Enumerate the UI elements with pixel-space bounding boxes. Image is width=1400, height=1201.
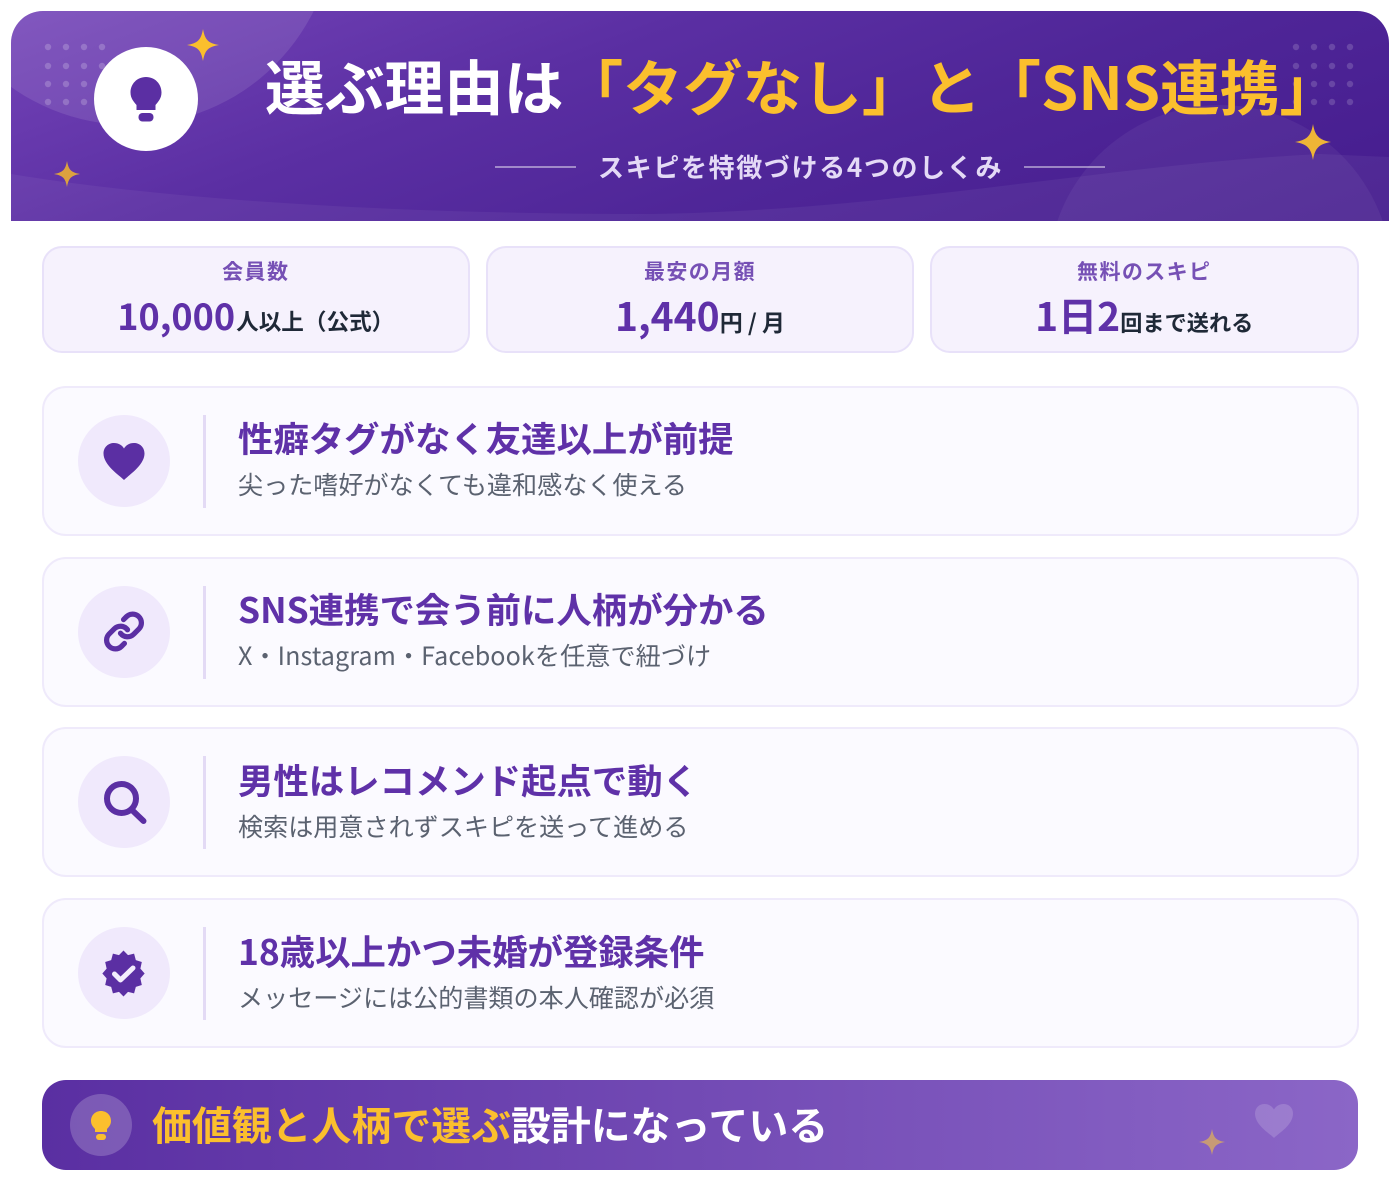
star: right <box>1295 124 1331 160</box>
card heading: 18歳以上かつ未婚が登録条件 <box>238 925 704 976</box>
stat card: members: 会員数 <box>222 256 289 286</box>
star <box>1199 1130 1224 1155</box>
stat card: free likes <box>930 246 1358 353</box>
bottom banner <box>42 1080 1358 1170</box>
card heading: SNS連携で会う前に人柄が分かる <box>238 582 769 634</box>
icon: bulb <box>70 1094 132 1156</box>
stat card: members: 10,000人以上（公式） <box>117 289 394 341</box>
icon: heart <box>78 415 170 507</box>
subtitle with rules: スキピを特徴づける4つのしくみ <box>598 148 1003 185</box>
icon: search <box>78 756 170 848</box>
stat card: lowest price: 最安の月額 <box>644 256 756 286</box>
icon: link <box>78 586 170 678</box>
card description: 尖った嗜好がなくても違和感なく使える <box>238 466 687 502</box>
summary text: 価値観と人柄で選ぶ設計になっている <box>152 1094 828 1152</box>
card description: メッセージには公的書類の本人確認が必須 <box>238 979 714 1015</box>
stat card: members <box>42 246 470 353</box>
stat card: lowest price: 1,440円 / 月 <box>615 287 785 343</box>
feature card: SNS link <box>42 557 1358 707</box>
card description: X・Instagram・Facebookを任意で紐づけ <box>238 636 711 672</box>
card description: 検索は用意されずスキピを送って進める <box>238 808 688 844</box>
feature card: recommendation <box>42 727 1358 877</box>
header banner <box>11 11 1389 221</box>
title: 選ぶ理由は「タグなし」と「SNS連携」 <box>265 42 1339 128</box>
icon: light bulb badge <box>94 47 198 151</box>
star: lower left <box>54 161 80 187</box>
feature card: no fetish tags <box>42 386 1358 536</box>
icon: faint heart <box>1255 1104 1293 1138</box>
stat card: lowest price <box>486 246 914 353</box>
icon: verified badge <box>78 927 170 1019</box>
stat card: free likes: 1日2回まで送れる <box>1035 287 1253 343</box>
star: top left <box>187 29 219 61</box>
card heading: 男性はレコメンド起点で動く <box>238 754 698 805</box>
card heading: 性癖タグがなく友達以上が前提 <box>238 412 733 462</box>
stat card: free likes: 無料のスキピ <box>1077 256 1211 286</box>
feature card: eligibility <box>42 898 1358 1048</box>
